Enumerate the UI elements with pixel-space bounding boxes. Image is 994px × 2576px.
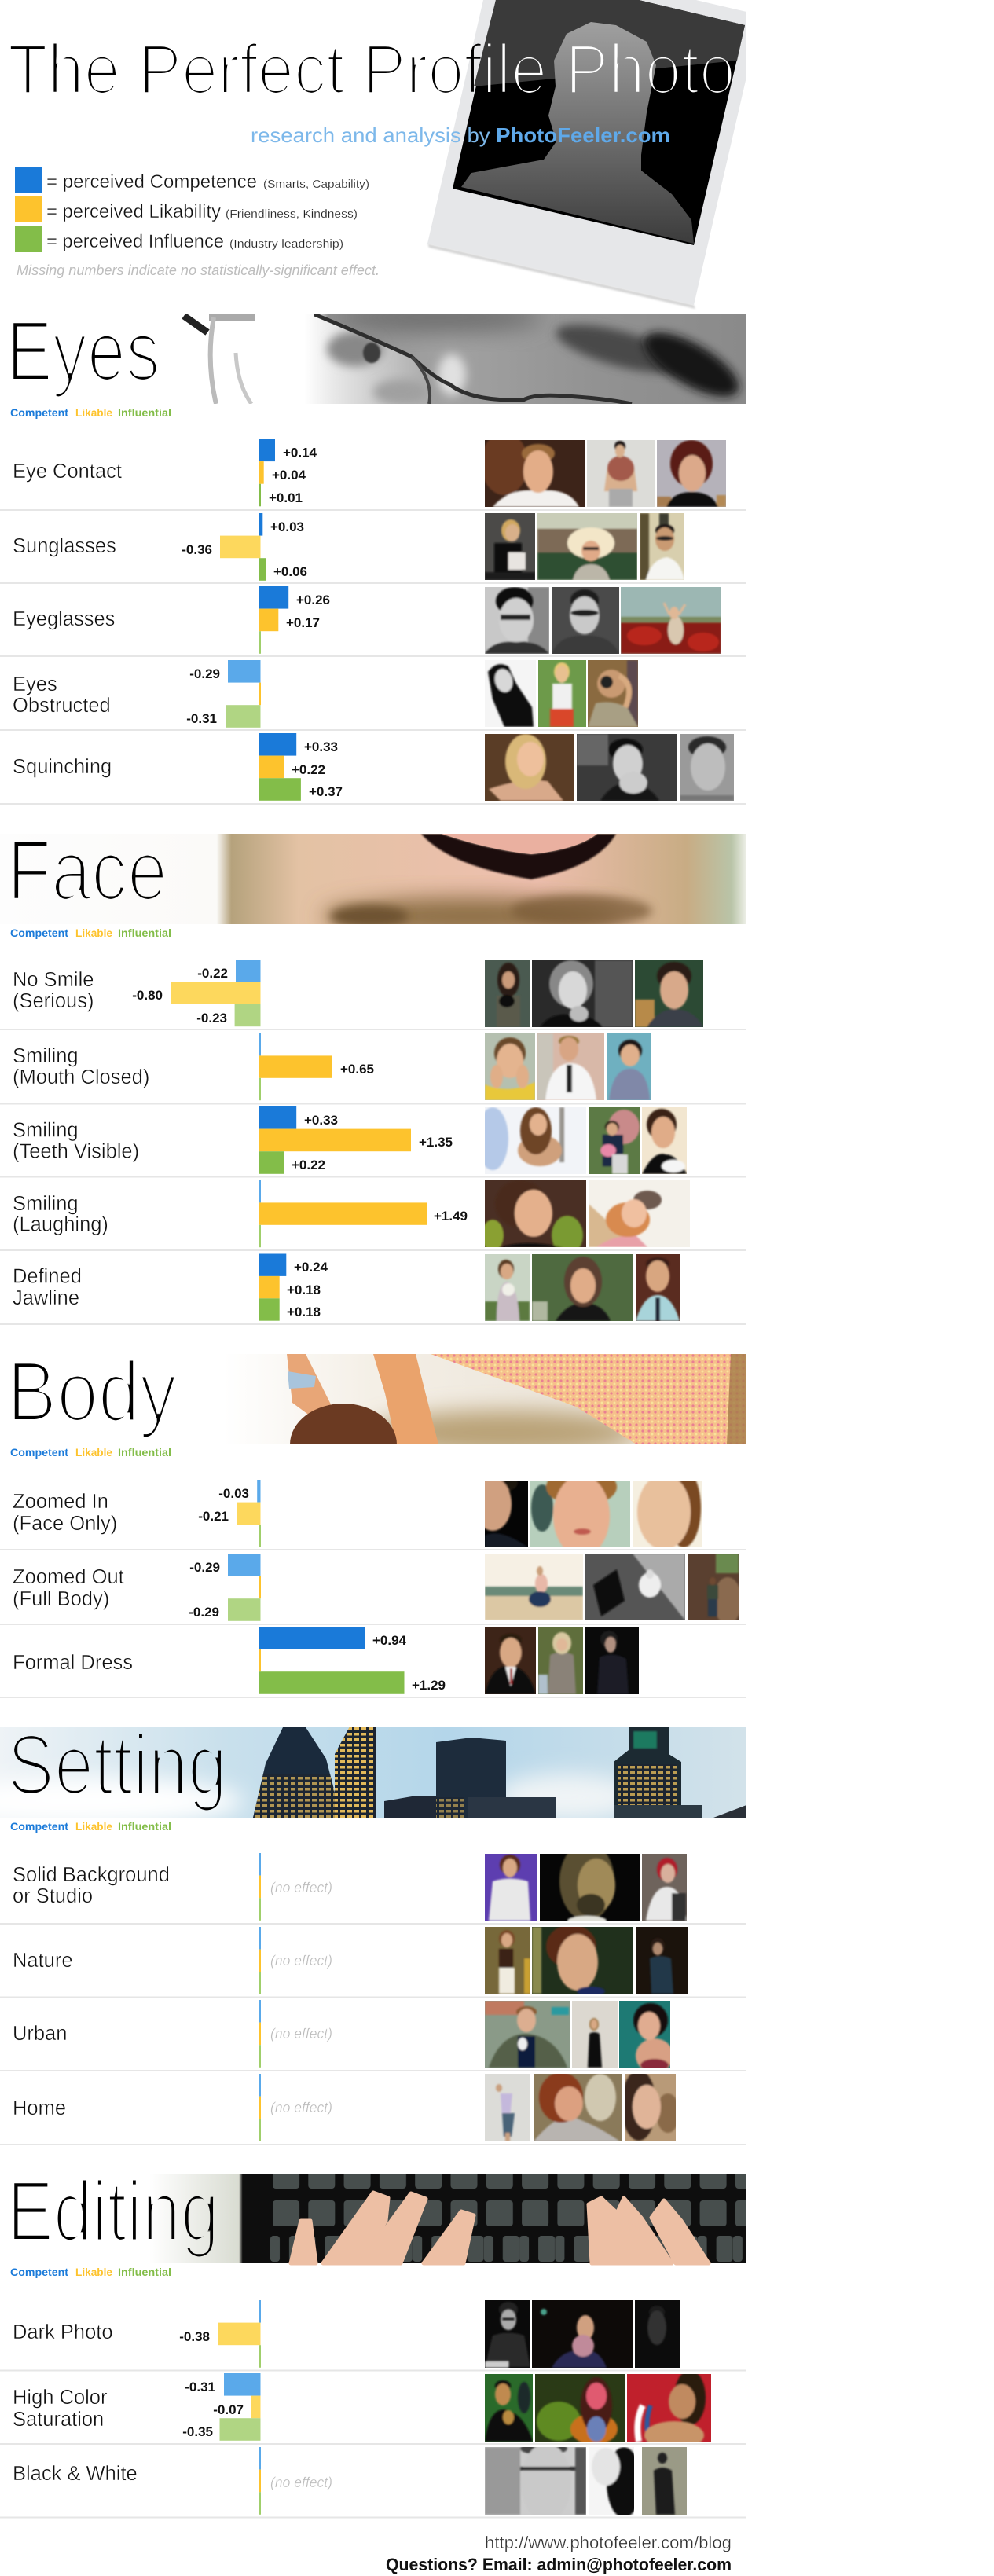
- label: Saturation: [13, 2409, 104, 2431]
- bars: [259, 2447, 332, 2515]
- bars: +0.33: [304, 739, 338, 754]
- label: Defined: [13, 1265, 82, 1287]
- row: High Color Saturation: [13, 2370, 711, 2449]
- photos: [485, 1254, 680, 1321]
- legend: influence: (Industry leadership): [229, 237, 343, 251]
- label: Jawline: [13, 1287, 79, 1309]
- key: [10, 927, 171, 939]
- key: Likable: [75, 406, 112, 419]
- key: Competent: [10, 406, 68, 419]
- key: Likable: [75, 2266, 112, 2278]
- key: Likable: [75, 927, 112, 939]
- bars: (no effect): [270, 2475, 332, 2490]
- bars: +0.37: [309, 784, 343, 799]
- label: No Smile: [13, 969, 94, 991]
- label: Sunglasses: [13, 535, 116, 557]
- bars: -0.35: [182, 2424, 213, 2439]
- photos: [485, 1033, 651, 1100]
- key: Competent: [10, 1820, 68, 1833]
- bars: (no effect): [270, 2026, 332, 2042]
- key: [10, 1446, 171, 1459]
- row: Solid Background or Studio: [13, 1842, 687, 1925]
- photos: [482, 1180, 690, 1255]
- bars: [259, 733, 343, 801]
- row: Home: [13, 2070, 680, 2141]
- heading: Face: Face: [7, 823, 167, 919]
- heading: Editing: Editing: [7, 2163, 219, 2259]
- title: [11, 44, 731, 93]
- row: Dark Photo: [13, 2300, 680, 2368]
- polaroid silhouette image: [427, 0, 746, 309]
- subtitle: research and analysis by PhotoFeeler.com: [251, 123, 670, 147]
- row: Zoomed In: [13, 1468, 702, 1557]
- bars: [259, 1627, 446, 1694]
- label: Squinching: [13, 756, 112, 778]
- photos: [485, 2300, 680, 2368]
- bars: +0.06: [273, 564, 307, 579]
- label: Zoomed Out: [13, 1566, 124, 1588]
- key: [10, 1820, 171, 1833]
- bars: -0.07: [213, 2402, 244, 2417]
- bars: +0.01: [269, 490, 303, 505]
- bars: -0.23: [196, 1011, 227, 1026]
- bars: [259, 1180, 468, 1247]
- banner: Eyes: [0, 302, 748, 409]
- bars: [259, 1033, 374, 1100]
- bars: [182, 2373, 261, 2441]
- bars: +1.29: [412, 1678, 446, 1693]
- section: Setting: [0, 1717, 746, 2145]
- bars: [259, 1106, 453, 1174]
- key: Likable: [75, 1820, 112, 1833]
- bars: -0.22: [197, 966, 228, 981]
- section: Body: [0, 1344, 746, 1698]
- photos: [485, 2001, 673, 2073]
- legend: likability: (Friendliness, Kindness): [226, 207, 358, 221]
- label: Home: [13, 2097, 66, 2119]
- label: Zoomed In: [13, 1491, 108, 1513]
- key: Influential: [118, 2266, 171, 2278]
- bars: +1.35: [419, 1135, 453, 1150]
- key: Competent: [10, 2266, 68, 2278]
- key: Competent: [10, 927, 68, 939]
- label: (Serious): [13, 990, 94, 1012]
- label: Smiling: [13, 1045, 79, 1067]
- label: Nature: [13, 1950, 73, 1972]
- heading: Body: Body: [7, 1344, 177, 1440]
- bars: -0.03: [218, 1486, 249, 1501]
- row: Formal Dress: [13, 1627, 639, 1694]
- title: The Perfect Profile Photo: [8, 31, 735, 109]
- legend: likability: [15, 196, 358, 222]
- key: Influential: [118, 406, 171, 419]
- bars: [186, 660, 261, 728]
- bars: -0.36: [182, 542, 212, 557]
- bars: +0.04: [272, 468, 306, 483]
- row: Eyes Obstructed: [13, 660, 638, 728]
- photos: [485, 2070, 680, 2141]
- row: No Smile: [13, 960, 703, 1027]
- row: Smiling (Teeth Visible): [13, 1106, 687, 1174]
- key: Influential: [118, 1820, 171, 1833]
- bars: -0.31: [185, 2380, 215, 2394]
- photos: [485, 1627, 639, 1694]
- label: (Teeth Visible): [13, 1141, 139, 1163]
- row: Urban: [13, 2000, 673, 2073]
- label: Solid Background: [13, 1864, 170, 1886]
- photos: [485, 734, 734, 801]
- heading: Eyes: Eyes: [6, 303, 160, 399]
- banner: Face: [0, 823, 746, 935]
- legend: influence: [15, 226, 343, 252]
- banner: Setting: [0, 1717, 746, 1825]
- bars: [259, 1853, 332, 1921]
- row: Smiling (Laughing): [13, 1180, 690, 1255]
- label: or Studio: [13, 1885, 93, 1907]
- bars: -0.38: [179, 2329, 210, 2344]
- bars: +1.49: [434, 1209, 468, 1224]
- key: Influential: [118, 927, 171, 939]
- section: Editing: [0, 2163, 746, 2522]
- bars: [179, 2300, 261, 2368]
- bars: (no effect): [270, 1953, 332, 1969]
- photos: [485, 660, 638, 727]
- label: (Mouth Closed): [13, 1066, 149, 1088]
- label: Eyeglasses: [13, 608, 115, 630]
- label: Smiling: [13, 1119, 79, 1141]
- photos: [485, 960, 703, 1027]
- heading: Setting: Setting: [7, 1717, 227, 1813]
- blog url: http://www.photofeeler.com/blog: [485, 2533, 732, 2552]
- bars: +0.22: [292, 1158, 325, 1172]
- photos: [485, 2370, 711, 2449]
- row: Defined Jawline: [13, 1254, 680, 1321]
- bars: +0.14: [283, 445, 317, 461]
- row: Nature: [13, 1925, 688, 1996]
- legend: likability: = perceived Likability: [46, 201, 221, 222]
- legend: competence: [15, 167, 369, 193]
- row: Eye Contact: [13, 432, 726, 507]
- bars: +0.18: [287, 1282, 321, 1297]
- bars: [259, 1927, 332, 1994]
- label: (Face Only): [13, 1513, 117, 1535]
- bars: (no effect): [270, 1880, 332, 1895]
- section: Eyes: [0, 302, 748, 805]
- bars: [189, 1554, 261, 1621]
- legend: competence: (Smarts, Capability): [263, 178, 369, 191]
- label: Black & White: [13, 2463, 138, 2485]
- bars: -0.31: [186, 711, 217, 726]
- photos: [485, 513, 684, 580]
- title: The Perfect Profile Photo: [8, 31, 735, 109]
- label: Formal Dress: [13, 1652, 133, 1674]
- photos: [485, 1554, 742, 1624]
- bars: +0.65: [340, 1062, 374, 1077]
- photos: [485, 2442, 687, 2522]
- legend: competence: = perceived Competence: [46, 171, 257, 193]
- photos: [485, 1925, 688, 1996]
- bars: +0.94: [372, 1633, 407, 1648]
- key: [10, 2266, 171, 2278]
- bars: -0.21: [198, 1509, 229, 1524]
- bars: +0.18: [287, 1305, 321, 1319]
- row: Eyeglasses: [13, 586, 721, 654]
- label: (Laughing): [13, 1213, 108, 1235]
- row: Smiling (Mouth Closed): [13, 1033, 651, 1100]
- bars: [259, 439, 317, 506]
- bars: +0.24: [294, 1260, 328, 1275]
- contact email: Questions? Email: admin@photofeeler.com: [386, 2555, 732, 2574]
- note: Missing numbers indicate no statistically-significant effect.: [17, 262, 380, 278]
- row: Squinching: [13, 733, 734, 801]
- key: [10, 406, 171, 419]
- photos: [481, 432, 726, 507]
- row: Sunglasses: [13, 513, 684, 581]
- bars: -0.29: [189, 1560, 220, 1575]
- photos: [485, 1842, 687, 1925]
- bars: [259, 1254, 328, 1321]
- bars: -0.29: [189, 666, 220, 681]
- key: Likable: [75, 1446, 112, 1459]
- bars: -0.29: [189, 1605, 219, 1620]
- label: Urban: [13, 2023, 67, 2045]
- header: [8, 0, 746, 309]
- label: High Color: [13, 2387, 107, 2409]
- bars: +0.22: [292, 762, 325, 777]
- bars: [198, 1480, 261, 1547]
- label: Dark Photo: [13, 2321, 113, 2343]
- banner: Editing: [0, 2163, 746, 2263]
- bars: +0.33: [304, 1113, 338, 1128]
- section: Face: [0, 823, 746, 1325]
- row: Black & White: [13, 2442, 687, 2522]
- legend: influence: = perceived Influence: [46, 231, 224, 252]
- label: Obstructed: [13, 695, 111, 717]
- bars: -0.80: [132, 988, 163, 1003]
- bars: (no effect): [270, 2100, 332, 2115]
- photos: [485, 587, 721, 654]
- label: Smiling: [13, 1193, 79, 1215]
- bars: +0.03: [270, 519, 304, 534]
- label: Eye Contact: [13, 461, 122, 483]
- banner: Body: [0, 1344, 746, 1485]
- bars: [259, 2074, 332, 2141]
- bars: [259, 586, 330, 654]
- bars: +0.17: [286, 615, 320, 630]
- bars: +0.26: [296, 593, 330, 607]
- key: Influential: [118, 1446, 171, 1459]
- bars: [259, 2000, 332, 2068]
- photos: [474, 1468, 702, 1557]
- label: Eyes: [13, 673, 57, 695]
- key: Competent: [10, 1446, 68, 1459]
- label: (Full Body): [13, 1588, 109, 1610]
- footer: [386, 2533, 732, 2574]
- photos: [477, 1107, 687, 1174]
- bars: [132, 960, 261, 1026]
- bars: [182, 513, 307, 581]
- row: Zoomed Out: [13, 1554, 742, 1624]
